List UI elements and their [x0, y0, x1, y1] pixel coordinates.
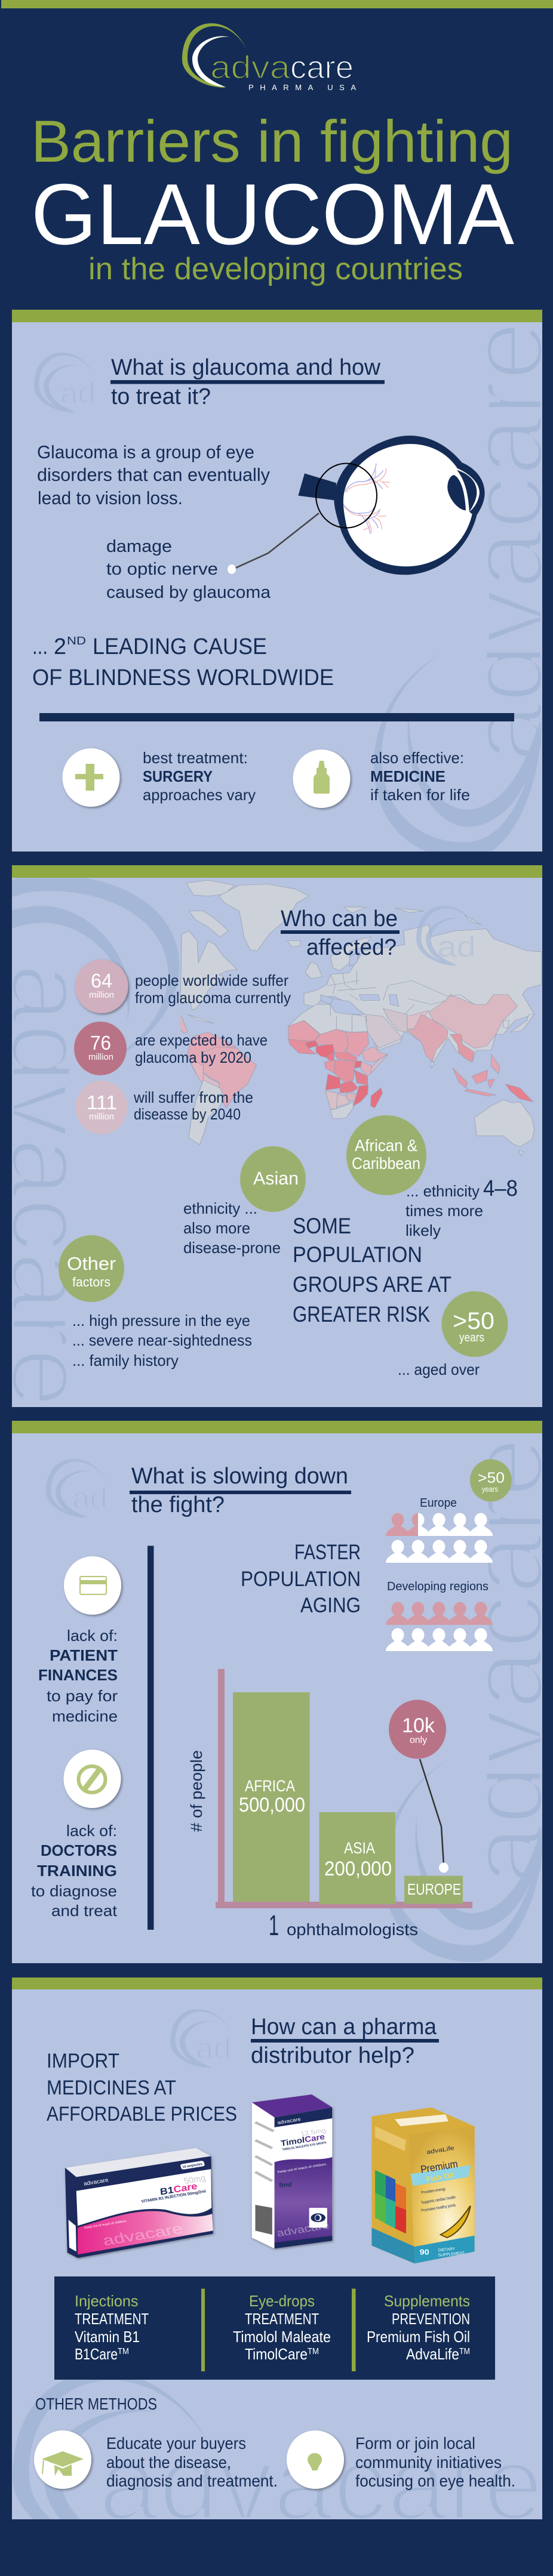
product: B1Care box: VITAMIN B1 INJECTION 50mg/2ml [140, 2189, 207, 2204]
badge: other factors [59, 1235, 124, 1302]
column: injections: Vitamin B1 [75, 2328, 140, 2346]
text: definition: lead to vision loss. [38, 488, 183, 508]
text: second leading cause: ... [32, 634, 48, 659]
stat: 111 million [75, 1081, 253, 1134]
text: other factors list [72, 1312, 252, 1369]
product: TimolCare box [252, 2094, 332, 2248]
logo: advacare [182, 23, 356, 92]
heading: other methods: OTHER METHODS [35, 2395, 157, 2413]
world map [172, 880, 542, 1156]
product: TimolCare box: TIMOLOL MALEATE EYE DROPS [282, 2141, 327, 2152]
text: surgery: best treatment: [143, 749, 248, 767]
stat: 64 million: 64 [91, 970, 112, 992]
text: African ethnicity 4-8 times: 4–8 [483, 1176, 518, 1201]
product: B1Care box: B1Care [158, 2181, 198, 2196]
product: Premium Fish Oil box [371, 2108, 475, 2263]
icon: eye diagram [298, 436, 485, 575]
text: definition: Glaucoma is a group of eye [37, 442, 254, 462]
heading: who can be affected: affected? [306, 935, 397, 960]
text: educate buyers: about the disease, [106, 2453, 231, 2472]
badge: over 50 small: >50 [478, 1470, 505, 1486]
icon: graduation cap [34, 2430, 91, 2489]
bar chart: people per ophthalmologist: # of people [188, 1750, 205, 1832]
text: doctors training: TRAINING [37, 1862, 117, 1880]
text: African ethnicity 4-8 times: likely [405, 1221, 441, 1239]
text: faster population aging: POPULATION [241, 1568, 361, 1591]
bar chart: people per ophthalmologist: ophthalmologists [287, 1920, 418, 1939]
badge: African and Caribbean: Caribbean [352, 1154, 420, 1173]
text: doctors training: DOCTORS [41, 1841, 117, 1859]
column: eye-drops: TimolCare [245, 2345, 308, 2363]
callout: damage to optic nerve: caused by glaucoma [106, 583, 271, 602]
text: educate buyers: Educate your buyers [106, 2434, 246, 2452]
logo: advacare: PHARMA USA [248, 83, 356, 92]
text: import medicines [47, 2050, 237, 2125]
column: injections [75, 2292, 149, 2363]
column: injections: TM [118, 2346, 129, 2356]
text: groups at greater risk [293, 1214, 451, 1326]
text: medicine [370, 749, 470, 804]
badge: African and Caribbean [346, 1115, 426, 1195]
callout: damage to optic nerve: to optic nerve [106, 560, 218, 579]
column: eye-drops: Timolol Maleate [233, 2328, 331, 2346]
text: patient finances: FINANCES [38, 1666, 118, 1684]
text: groups at greater risk: SOME [293, 1214, 351, 1238]
pictogram: Europe population: Europe [420, 1497, 457, 1510]
text: Asian ethnicity: also more [183, 1219, 250, 1237]
stat: 111 million: 111 [87, 1091, 117, 1113]
text: other factors list: ... severe near-sightedness [72, 1331, 252, 1349]
bar chart: people per ophthalmologist: ASIA [344, 1839, 375, 1857]
product: B1Care box: 50mg [182, 2173, 207, 2186]
product: TimolCare box: advacare [275, 2220, 331, 2239]
column: supplements: AdvaLife [406, 2345, 459, 2363]
icon: medicine bottle [293, 749, 350, 808]
panel: what is glaucoma: ad [60, 378, 96, 409]
stat: 64 million: people worldwide suffer [135, 971, 288, 989]
product: B1Care box: 10 ampoules [182, 2162, 203, 2169]
pictogram: developing regions population: Developing regions [387, 1580, 489, 1593]
panel: how can a pharma distributor help [12, 1977, 543, 2559]
text: Asian ethnicity: ethnicity ... [183, 1199, 257, 1217]
heading: what is glaucoma [110, 355, 385, 409]
icon: surgery plus [62, 748, 119, 807]
column: injections: Injections [75, 2292, 139, 2310]
product: Premium Fish Oil box: Supports cardiac health [420, 2195, 456, 2205]
text: medicine: also effective: [370, 749, 464, 767]
text: community initiatives: focusing on eye health. [355, 2472, 515, 2490]
icon: watermark logo: ad [437, 931, 476, 963]
product: B1Care box: advacare [83, 2177, 109, 2187]
stat: 111 million: diseasse by 2040 [134, 1105, 241, 1123]
text: educate buyers: diagnosis and treatment. [106, 2472, 278, 2490]
product: Premium Fish Oil box: advaLife [426, 2145, 455, 2155]
callout: 10k only: only [410, 1735, 427, 1745]
badge: Asian [240, 1146, 306, 1212]
bar chart: people per ophthalmologist: AFRICA [245, 1777, 295, 1795]
icon: light bulb [287, 2430, 344, 2489]
text: doctors training: and treat [51, 1902, 118, 1920]
bar chart: people per ophthalmologist [188, 1669, 472, 1942]
text: other factors list: ... high pressure in the eye [72, 1312, 250, 1329]
logo: advacare: care [290, 50, 354, 85]
heading: who can be affected: Who can be [281, 906, 398, 931]
panel: who can be affected [0, 865, 542, 1408]
text: educate buyers [106, 2434, 278, 2490]
product: TimolCare box: Keep out of reach of children. [277, 2162, 328, 2174]
text: surgery: SURGERY [143, 767, 213, 785]
icon: prohibited sign [63, 1750, 121, 1808]
text: second leading cause: OF BLINDNESS WORLDWIDE [32, 665, 334, 690]
text: Asian ethnicity: disease-prone [183, 1239, 281, 1257]
stat: 76 million: 76 [90, 1032, 111, 1054]
product: Premium Fish Oil box: Promotes healthy joints [420, 2203, 456, 2213]
product: Premium Fish Oil box: Premium [419, 2158, 459, 2176]
badge: other factors: Other [67, 1253, 116, 1274]
stat: 76 million: million [88, 1052, 113, 1062]
title: GLAUCOMA [31, 166, 514, 263]
badge: over 50 small [470, 1460, 512, 1501]
heading: pharma distributor: How can a pharma [251, 2014, 437, 2040]
heading: slowing down: the fight? [131, 1492, 225, 1517]
callout: 10k only [389, 1699, 448, 1872]
table: product types [54, 2276, 495, 2380]
text: doctors training: to diagnose [31, 1882, 117, 1900]
column: supplements: TM [459, 2346, 470, 2356]
heading: who can be affected [281, 906, 400, 960]
product: Premium Fish Oil box: DIETARY [438, 2247, 456, 2253]
heading: what is glaucoma: What is glaucoma and how [111, 355, 381, 380]
text: patient finances: medicine [52, 1707, 118, 1725]
column: injections: TREATMENT [75, 2310, 149, 2328]
product: TimolCare box: 5ml [279, 2181, 292, 2188]
bar chart: people per ophthalmologist: EUROPE [407, 1880, 461, 1898]
title: in the developing countries [88, 252, 463, 286]
bar chart: people per ophthalmologist: 1 [269, 1910, 279, 1942]
text: patient finances: lack of: [67, 1627, 118, 1645]
panel: what is glaucoma [12, 310, 553, 859]
column: supplements [367, 2292, 470, 2363]
callout: 10k only: 10k [402, 1714, 435, 1737]
heading: slowing down [130, 1464, 351, 1517]
column: supplements: Premium Fish Oil [367, 2328, 470, 2346]
column: eye-drops: Eye-drops [249, 2292, 315, 2310]
heading: pharma distributor [251, 2014, 439, 2068]
text: second leading cause: ND [67, 635, 86, 647]
text: patient finances: to pay for [47, 1687, 118, 1705]
text: patient finances [38, 1627, 118, 1725]
stat: 111 million: will suffer from the [133, 1088, 253, 1106]
bar chart: people per ophthalmologist: 200,000 [324, 1858, 392, 1880]
heading: slowing down: What is slowing down [131, 1464, 348, 1489]
badge: over 50 years: >50 [453, 1308, 494, 1334]
text: community initiatives [355, 2434, 515, 2490]
stat: 76 million: are expected to have [135, 1031, 268, 1049]
panel: what is slowing down the fight [12, 1421, 553, 1963]
text: African ethnicity 4-8 times: ... ethnicity [406, 1182, 480, 1200]
product: B1Care box: Keep out of reach of children. [84, 2219, 128, 2230]
badge: Asian: Asian [253, 1168, 299, 1189]
text: doctors training: lack of: [66, 1822, 117, 1840]
bar chart: people per ophthalmologist: 500,000 [239, 1794, 305, 1816]
stat: 111 million: million [89, 1112, 114, 1122]
stat: 76 million: glaucoma by 2020 [135, 1048, 251, 1066]
text: groups at greater risk: POPULATION [293, 1242, 422, 1267]
column: supplements: PREVENTION [392, 2310, 470, 2328]
text: medicine: if taken for life [370, 786, 470, 804]
badge: other factors: factors [72, 1275, 110, 1289]
panel: what is slowing down the fight: ad [72, 1483, 107, 1514]
text: other factors list: ... family history [72, 1352, 179, 1369]
text: second leading cause: LEADING CAUSE [93, 634, 267, 659]
title [31, 108, 514, 286]
badge: over 50 small: years [482, 1485, 498, 1494]
product: B1Care box: advacare [100, 2221, 185, 2249]
stat: 64 million [75, 960, 291, 1013]
panel: how can a pharma distributor help: ad [196, 2033, 231, 2065]
text: faster population aging [241, 1541, 361, 1617]
pictogram: developing regions population [386, 1580, 493, 1651]
callout: damage to optic nerve: damage [106, 537, 172, 556]
callout: damage to optic nerve [106, 513, 319, 602]
product: B1Care box [65, 2148, 213, 2258]
badge: over 50 years: years [459, 1331, 484, 1344]
text: community initiatives: community initiatives [355, 2453, 502, 2472]
logo: advacare: adva [210, 50, 291, 85]
product: Premium Fish Oil box: 90 [420, 2248, 429, 2257]
column: eye-drops: TM [308, 2346, 319, 2356]
text: import medicines: MEDICINES AT [47, 2077, 176, 2099]
column: eye-drops: TREATMENT [245, 2310, 319, 2328]
panel: how can a pharma distributor help: advacare [99, 2426, 543, 2542]
heading: what is glaucoma: to treat it? [111, 384, 211, 409]
text: groups at greater risk: GREATER RISK [293, 1302, 430, 1326]
text: community initiatives: Form or join local [355, 2434, 475, 2452]
product: Premium Fish Oil box: Provides energy [420, 2186, 447, 2195]
text: definition: disorders that can eventually [37, 464, 270, 485]
product: Premium Fish Oil box: SUPPLEMENT [438, 2251, 465, 2257]
text: surgery: approaches vary [143, 786, 256, 804]
text: import medicines: AFFORDABLE PRICES [47, 2103, 237, 2125]
text: second leading cause: 2 [54, 634, 66, 659]
text: doctors training [31, 1822, 118, 1920]
text: medicine: MEDICINE [370, 767, 446, 785]
text: import medicines: IMPORT [47, 2050, 119, 2072]
text: African ethnicity 4-8 times: times more [405, 1202, 483, 1220]
product: TimolCare box: 12.5mg [299, 2127, 327, 2137]
heading: pharma distributor: distributor help? [251, 2043, 414, 2068]
stat: 76 million [74, 1022, 268, 1075]
product: TimolCare box: advacare [276, 2117, 302, 2125]
stat: 64 million: from glaucoma currently [135, 989, 291, 1007]
column: eye-drops [233, 2292, 331, 2363]
product: TimolCare box: TimolCare [279, 2133, 326, 2148]
stat: 64 million: million [89, 990, 114, 1000]
column: supplements: Supplements [384, 2292, 470, 2310]
text: second leading cause [32, 634, 334, 690]
text: groups at greater risk: GROUPS ARE AT [293, 1272, 451, 1297]
pictogram: Europe population [386, 1497, 493, 1563]
column: injections: B1Care [75, 2345, 118, 2363]
text: surgery [143, 749, 256, 804]
icon: credit card [64, 1556, 121, 1615]
badge: African and Caribbean: African & [355, 1136, 417, 1155]
badge: over 50 years [442, 1291, 508, 1357]
text: definition [37, 442, 270, 508]
text: patient finances: PATIENT [50, 1646, 118, 1664]
title: Barriers in fighting [31, 108, 513, 174]
text: faster population aging: FASTER [294, 1541, 361, 1564]
text: African ethnicity 4-8 times [405, 1176, 518, 1239]
product: Premium Fish Oil box: Fish Oil [425, 2171, 455, 2184]
text: aged over: ... aged over [398, 1361, 480, 1378]
text: faster population aging: AGING [300, 1594, 361, 1617]
text: Asian ethnicity [183, 1199, 281, 1257]
